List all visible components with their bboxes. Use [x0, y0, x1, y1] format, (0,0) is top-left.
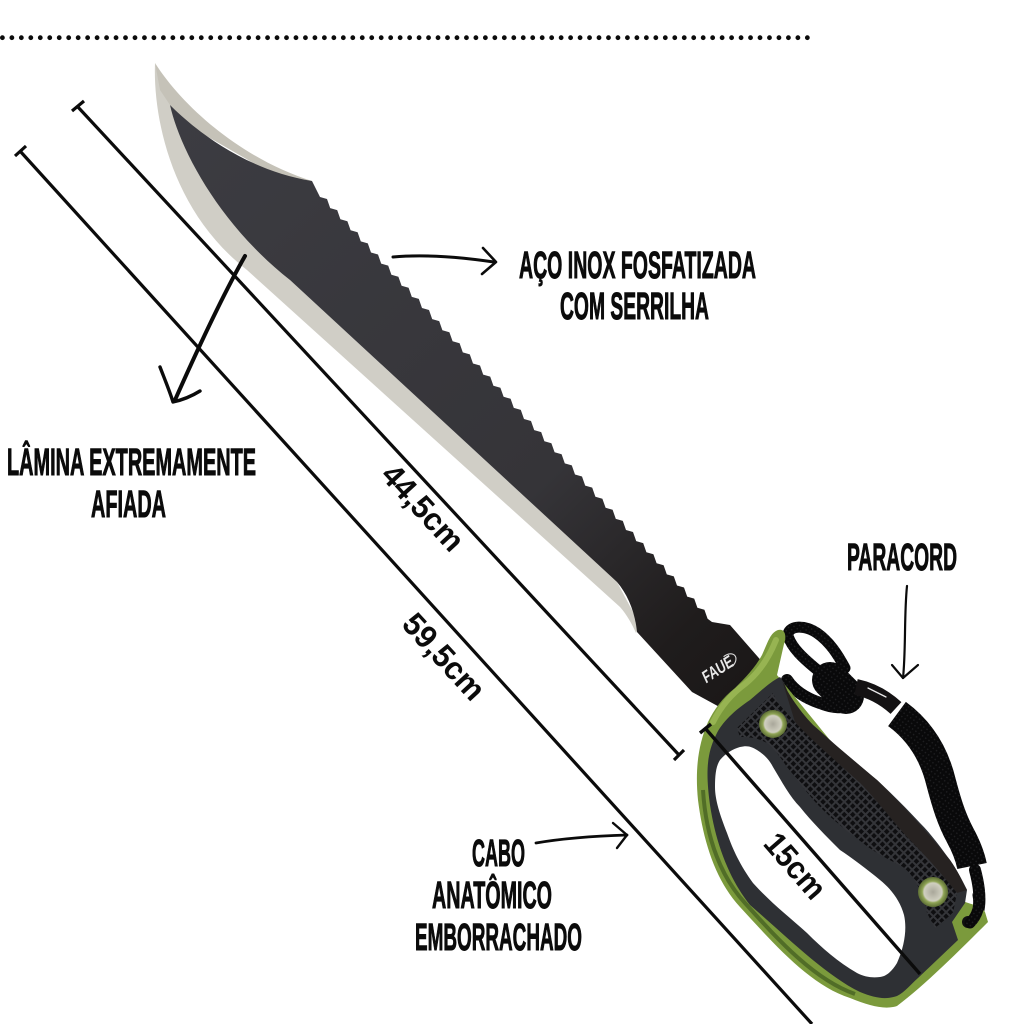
guard highlight: [713, 640, 776, 722]
dimension line 59,5cm: [15, 146, 812, 1024]
paracord: [787, 627, 979, 925]
dotted top divider: [2, 35, 810, 40]
text: steel label: AÇO INOX FOSFATIZADA: [519, 245, 756, 287]
text: EMBORRACHADO: [415, 917, 582, 959]
guard green shell: [697, 630, 988, 1008]
text: blade label: LÂMINA EXTREMAMENTE: [7, 440, 256, 484]
arrow to paracord: [892, 586, 918, 678]
cord end: [967, 870, 979, 925]
blade silver top band: [155, 63, 312, 190]
rivet top: [759, 710, 787, 738]
cord knot: [830, 680, 846, 696]
machete blade: [155, 63, 765, 710]
label 15cm: 15cm: [757, 825, 834, 906]
label 44,5cm: 44,5cm: [374, 457, 472, 558]
strand gap: [868, 688, 886, 697]
text: handle label: [415, 833, 582, 959]
blade black serrated body: [170, 105, 765, 710]
green guard and handle: [697, 630, 988, 1008]
text: steel label: [519, 245, 756, 328]
dimension line 44,5cm: [72, 101, 684, 760]
upper cord loop: [788, 627, 845, 668]
text: steel label: COM SERRILHA: [560, 286, 709, 328]
dimension line 15cm: [700, 724, 920, 974]
arrow from handle label: [536, 823, 627, 848]
textured grip: [737, 693, 957, 928]
lanyard cord through hole: [970, 895, 979, 923]
guard shadow: [703, 790, 855, 994]
lanyard hole: [962, 916, 974, 928]
lower cord loop: [787, 680, 852, 707]
rivet bottom: [918, 877, 948, 907]
blade lower bevel: [155, 63, 640, 633]
text: handle label: ANATÔMICO: [432, 872, 552, 917]
blade logo: FAUE: [698, 652, 737, 687]
wrapped cord: [897, 714, 972, 866]
label 59,5cm: 59,5cm: [395, 606, 493, 707]
handle back strip: [782, 680, 967, 893]
cord strands to wrap: [856, 687, 896, 708]
arrow to serration label: [393, 248, 496, 274]
handle black body: [708, 677, 967, 998]
text: blade label: AFIADA: [91, 484, 166, 526]
arrow to blade edge label: [160, 256, 245, 402]
text: handle label: CABO: [472, 833, 525, 875]
handle window: [715, 746, 905, 977]
text: blade label: [7, 440, 256, 526]
